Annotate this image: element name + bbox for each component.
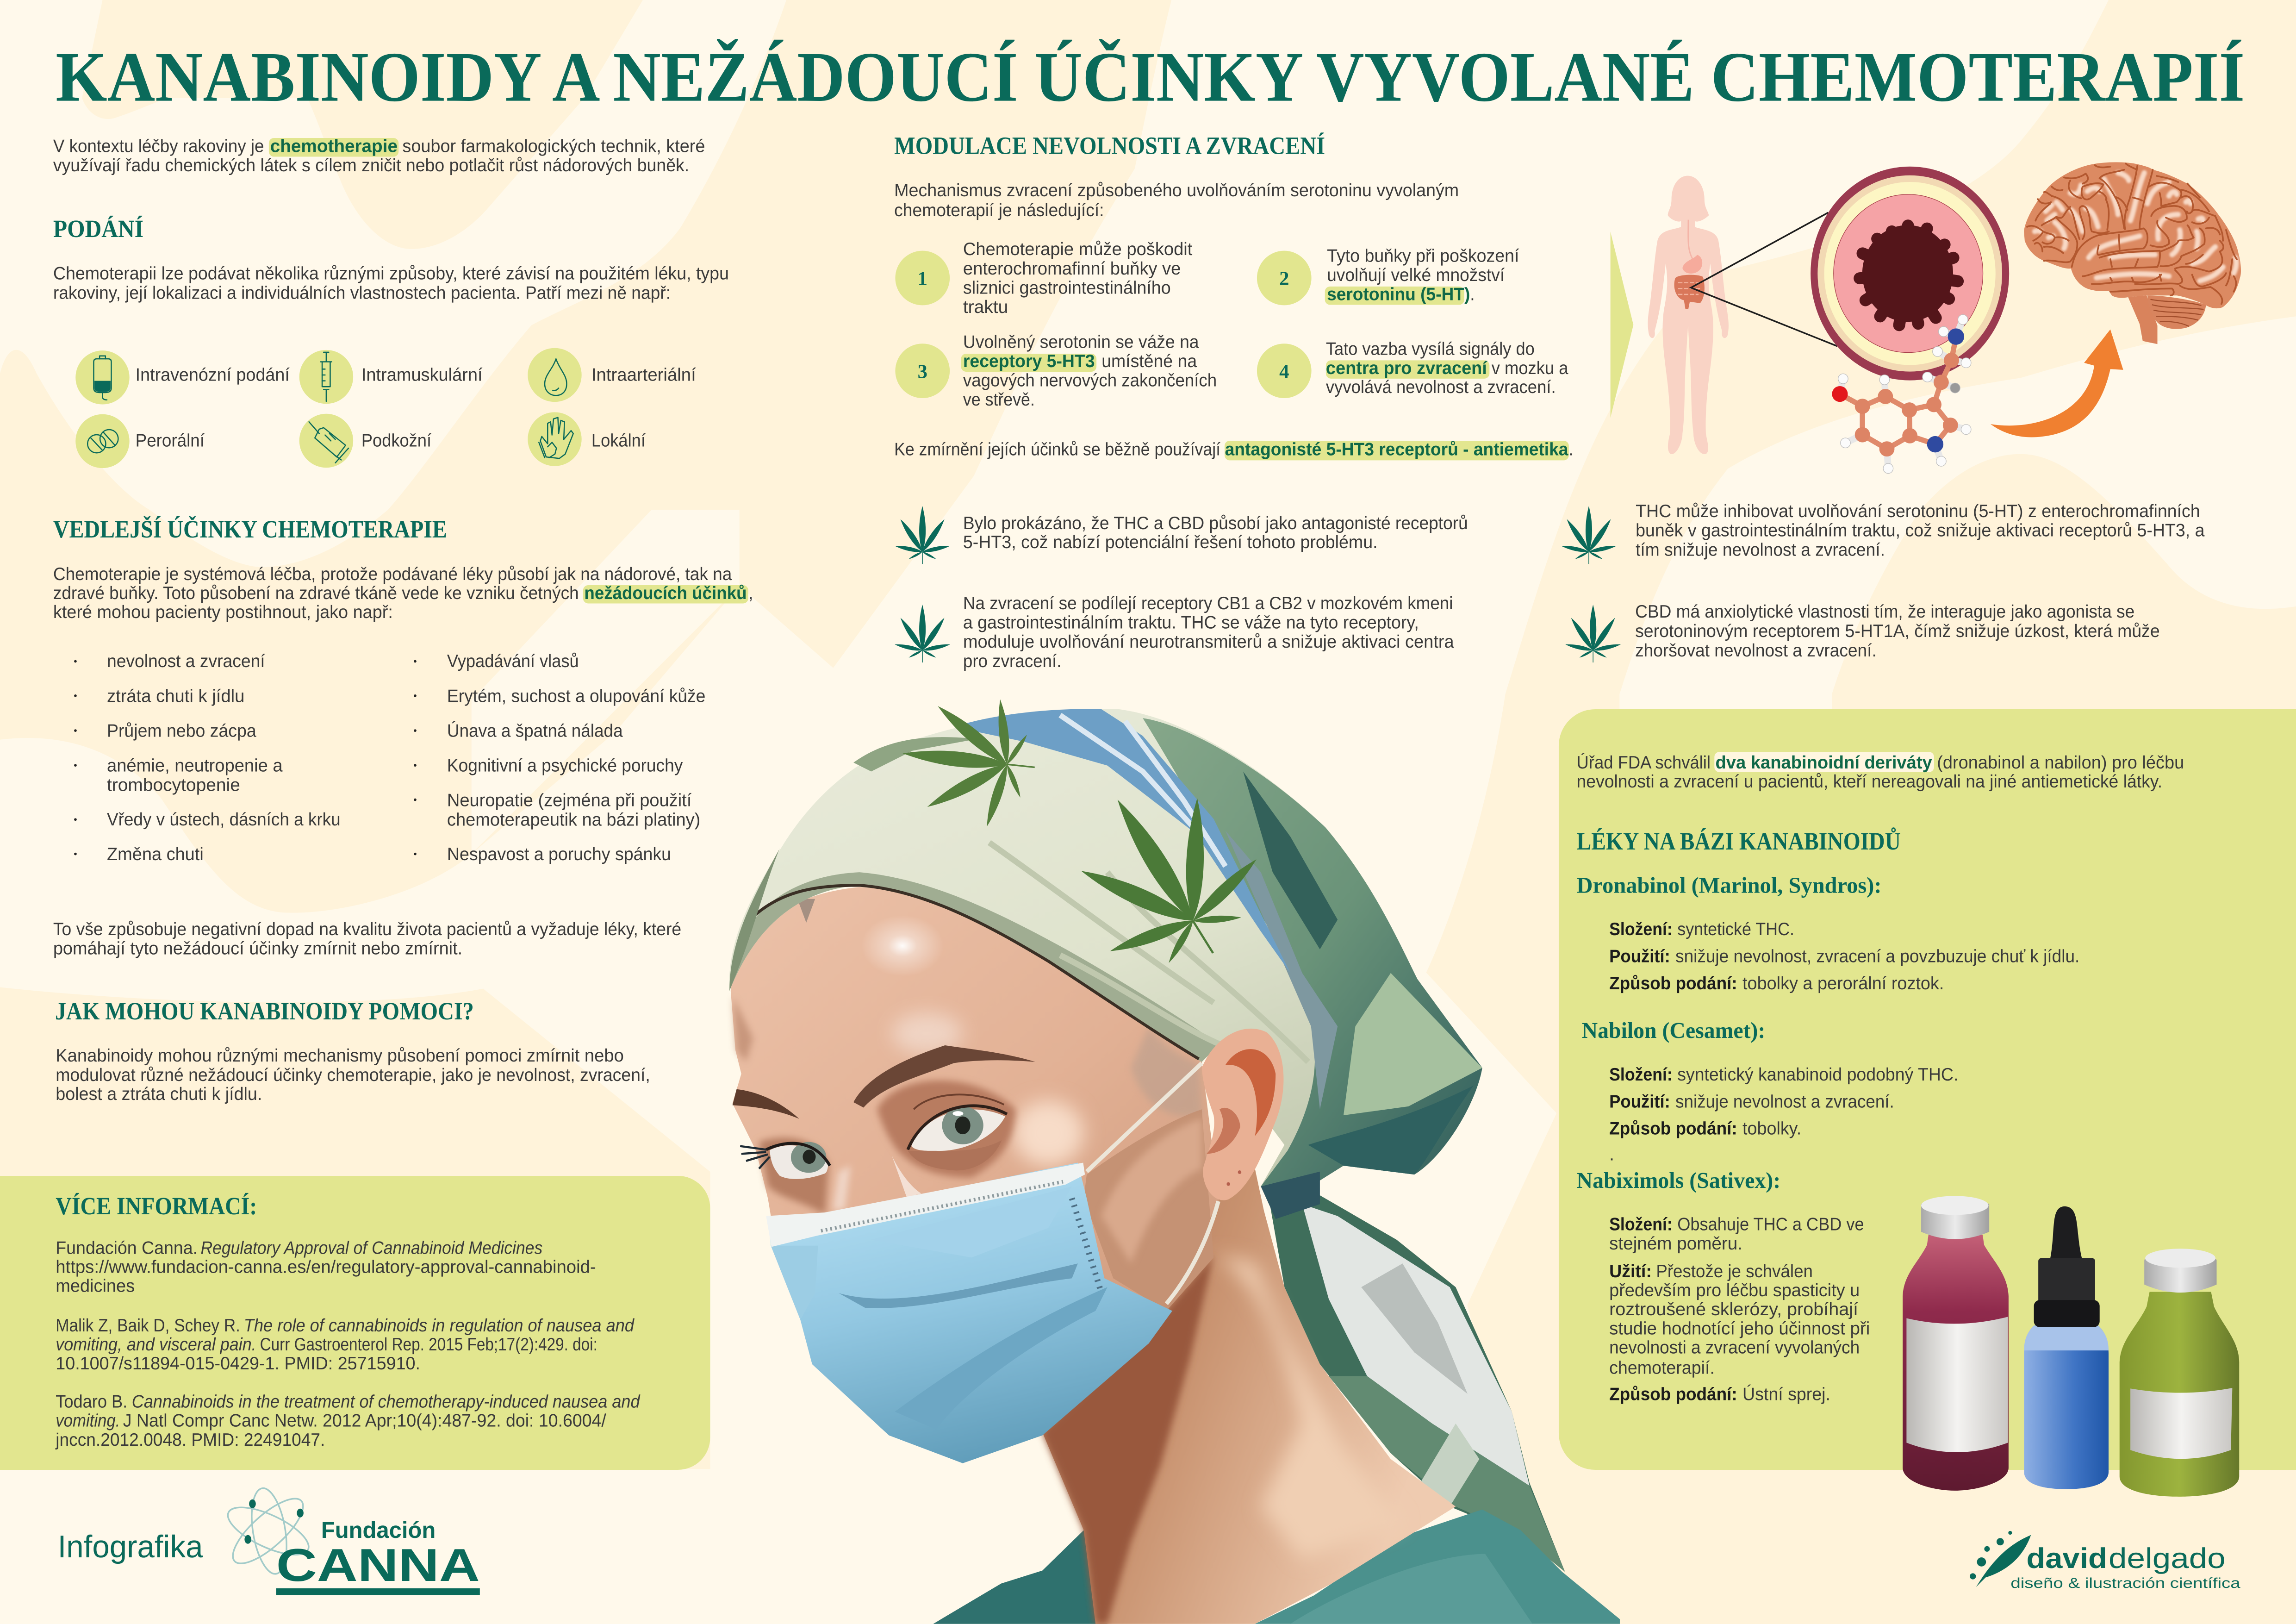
eyebrows (853, 1045, 1035, 1107)
dronabinol: Dronabinol (Marinol, Syndros): (1577, 874, 1882, 899)
heading: how cannabinoids help: JAK MOHOU KANABINOIDY POMOCI? (55, 998, 474, 1025)
left eye (740, 1142, 830, 1179)
shirt (933, 1510, 1620, 1624)
references: Fundación Canna. (56, 1237, 198, 1258)
references: jnccn.2012.0048. PMID: 22491047. (54, 1430, 325, 1450)
text: antagonists: . (1568, 439, 1574, 460)
text: thc cbd antagonists: Bylo prokázáno, že THC a CBD působí jako antagonisté receptorů (963, 513, 1468, 533)
nabiximols: především pro léčbu spasticity u (1609, 1280, 1860, 1301)
fda text: dva kanabinoidní deriváty (1716, 752, 1932, 773)
references: 10.1007/s11894-015-0429-1. PMID: 25715910. (56, 1353, 420, 1374)
text: how cannabinoids help: bolest a ztráta chuti k jídlu. (56, 1084, 262, 1105)
mask (766, 1163, 1172, 1463)
icon: pills (75, 414, 130, 468)
illustration: pointer lines (1691, 212, 1837, 346)
nabiximols: stejném poměru. (1609, 1233, 1742, 1254)
nabiximols: roztroušené sklerózy, probíhají (1609, 1299, 1859, 1320)
dronabinol: snižuje nevolnost, zvracení a povzbuzuje chuť k jídlu. (1675, 946, 2079, 967)
panel: cannabinoid drugs (1559, 709, 2296, 1470)
text: mechanism intro: chemoterapií je následující: (894, 200, 1104, 220)
text: cbd anxiolytic: serotoninovým receptorem 5-HT1A, čímž snižuje úzkost, která může (1635, 621, 2160, 641)
nabiximols: nevolnosti a zvracení vyvolaných (1609, 1337, 1860, 1358)
step 2: serotoninu (5-HT). (1327, 284, 1475, 305)
dronabinol: Složení: (1609, 919, 1673, 940)
nabiximols (1577, 1169, 1870, 1405)
list: side effects left: Změna chuti (107, 844, 204, 864)
sulci (2027, 163, 2237, 304)
text: antagonists: antagonisté 5-HT3 receptorů - antiemetika (1225, 439, 1568, 460)
nabiximols: Nabiximols (Sativex): (1577, 1169, 1780, 1194)
references: Todaro B. (56, 1392, 127, 1412)
list: side effects right: Kognitivní a psychické poruchy (447, 756, 684, 776)
nabilon: syntetický kanabinoid podobný THC. (1677, 1064, 1958, 1085)
step 4: Tato vazba vysílá signály do (1326, 338, 1535, 359)
step 1: Chemoterapie může poškodit (963, 239, 1193, 259)
nabilon: tobolky. (1742, 1118, 1801, 1139)
text: cb1 cb2: a gastrointestinálním traktu. THC se váže na tyto receptory, (963, 612, 1419, 633)
list: side effects right: Erytém, suchost a olupování kůže (447, 686, 706, 706)
text: cb1 cb2: moduluje uvolňování neurotransmiterů a snižuje aktivaci centra (963, 631, 1454, 652)
list: side effects left: ztráta chuti k jídlu (107, 686, 245, 706)
references: J Natl Compr Canc Netw. 2012 Apr;10(4):487-92. doi: 10.6004/ (123, 1411, 607, 1431)
icon: cannabis leaf (894, 605, 951, 662)
logo: fundación canna (222, 1486, 480, 1595)
text: side effects (53, 564, 753, 623)
step 3 (895, 332, 1217, 410)
label: Lokální (591, 431, 647, 451)
step 2: 2 (1279, 267, 1289, 289)
text: negative impact (53, 919, 682, 959)
nabilon: snižuje nevolnost a zvracení. (1675, 1092, 1894, 1112)
list: side effects right: Neuropatie (zejména při použití (447, 790, 692, 811)
illustration: bottles (1903, 1196, 2239, 1497)
red bottle (1903, 1196, 2009, 1491)
text: thc inhibits: buněk v gastrointestinálním traktu, což snižuje aktivaci receptorů 5-HT3, a (1636, 520, 2205, 541)
brain stem (2128, 295, 2158, 344)
references: Malik Z, Baik D, Schey R. (56, 1315, 240, 1336)
neck (1042, 1168, 1456, 1624)
step 4: vyvolává nevolnost a zvracení. (1326, 377, 1556, 398)
dronabinol (1577, 874, 2079, 993)
heading: podání: PODÁNÍ (53, 215, 144, 243)
label: Intraarteriální (591, 364, 697, 385)
ear (1202, 1029, 1283, 1200)
illustration: woman with mask and scarf (729, 689, 1620, 1624)
fda text (1577, 752, 2184, 792)
list: side effects left: anémie, neutropenie a (107, 756, 283, 776)
intro text: soubor farmakologických technik, které (402, 136, 705, 156)
blue dropper (2024, 1206, 2109, 1489)
step 3: Uvolněný serotonin se váže na (963, 332, 1199, 352)
step 3: 3 (918, 360, 928, 382)
panel: more information (0, 1176, 710, 1470)
infografika label: Infografika (58, 1530, 203, 1565)
intro text: chemotherapie (270, 136, 398, 156)
dronabinol: tobolky a perorální roztok. (1742, 973, 1944, 993)
illustration: brain (2024, 162, 2241, 344)
logo: david delgado: david (2027, 1543, 2107, 1575)
text: antagonists: Ke zmírnění jejích účinků se běžně používají (894, 439, 1221, 460)
step 4: v mozku a (1492, 358, 1568, 379)
label: Intravenózní podání (136, 364, 291, 385)
references: Regulatory Approval of Cannabinoid Medicines (200, 1237, 542, 1258)
nabilon: . (1609, 1144, 1614, 1165)
text: podání (53, 263, 729, 303)
text: mechanism intro: Mechanismus zvracení způsobeného uvolňováním serotoninu vyvolaným (894, 180, 1459, 200)
references: vomiting, and visceral pain. (56, 1334, 256, 1355)
step 1: traktu (963, 297, 1008, 318)
nabiximols: Obsahuje THC a CBD ve (1677, 1214, 1864, 1235)
fda text: (dronabinol a nabilon) pro léčbu (1937, 752, 2184, 773)
text: side effects: zdravé buňky. Toto působení na zdravé tkáně vede ke vzniku četných (53, 583, 579, 604)
steps (895, 239, 1568, 410)
step 1: enterochromafinní buňky ve (963, 258, 1181, 279)
nabilon (1582, 1019, 1958, 1165)
icon: syringe (299, 350, 353, 404)
arrow: orange (1991, 330, 2123, 437)
fda text: nevolnosti a zvracení u pacientů, kteří nereagovali na jiné antiemetické látky. (1577, 771, 2162, 792)
intro text (53, 136, 705, 175)
nabiximols: Užití: (1609, 1261, 1652, 1281)
illustration: intestine cross-section (1811, 167, 2009, 381)
label: Intramuskulární (361, 364, 483, 385)
list: side effects right: Únava a špatná nálada (447, 721, 623, 741)
step 4 (1257, 338, 1568, 398)
references: medicines (56, 1276, 135, 1296)
text: side effects: , (748, 583, 753, 604)
references: The role of cannabinoids in regulation of nausea and (244, 1315, 635, 1336)
icon: cannabis leaf (1561, 506, 1617, 564)
step 1: 1 (918, 267, 928, 289)
heading: modulation: MODULACE NEVOLNOSTI A ZVRACENÍ (894, 132, 1325, 160)
nabiximols: Složení: (1609, 1214, 1673, 1235)
face (731, 887, 1220, 1311)
scarf leaf (1043, 753, 1287, 999)
text: how cannabinoids help: Kanabinoidy mohou různými mechanismy působení pomoci zmírnit nebo (56, 1045, 624, 1066)
text: thc inhibits (1636, 501, 2205, 560)
logo: david delgado: delgado (2109, 1543, 2226, 1575)
step 2: Tyto buňky při poškození (1327, 246, 1520, 266)
dronabinol: Způsob podání: (1609, 973, 1737, 993)
intro text: V kontextu léčby rakoviny je (53, 136, 264, 156)
text: cb1 cb2: Na zvracení se podílejí receptory CB1 a CB2 v mozkovém kmeni (963, 593, 1453, 614)
list: side effects left: nevolnost a zvracení (107, 651, 266, 672)
intro text: využívají řadu chemických látek s cílem zničit nebo potlačit růst nádorových buněk. (53, 155, 689, 175)
list: side effects right: chemoterapeutik na bázi platiny) (447, 810, 700, 830)
text: podání: Chemoterapii lze podávat několika různými způsoby, které závisí na použitém léku, typu (53, 263, 729, 284)
illustration: serotonin molecule (1832, 315, 1971, 474)
nabilon: Použití: (1609, 1092, 1670, 1112)
text: cb1 cb2: pro zvracení. (963, 651, 1062, 672)
heading: side effects: VEDLEJŠÍ ÚČINKY CHEMOTERAPIE (53, 516, 447, 543)
icon: subcutaneous syringe (299, 414, 353, 468)
ear loops (1087, 1063, 1218, 1304)
nabiximols: Způsob podání: (1609, 1384, 1737, 1405)
illustration: body silhouette (1648, 176, 1729, 454)
label: Perorální (136, 431, 205, 451)
administration routes (75, 348, 697, 468)
eye socket (877, 1081, 1016, 1178)
references (54, 1237, 641, 1450)
icon: cannabis leaf (894, 506, 951, 564)
text: negative impact: To vše způsobuje negativní dopad na kvalitu života pacientů a vyžaduje léky, které (53, 919, 682, 940)
text: antagonists (894, 439, 1574, 460)
icon: cannabis leaf (1565, 605, 1621, 662)
text: how cannabinoids help: modulovat různé nežádoucí účinky chemoterapie, jako je nevolnost, zvracení, (56, 1065, 650, 1085)
logo: david delgado (1970, 1531, 2241, 1592)
label: Podkožní (361, 431, 432, 451)
nabilon: Nabilon (Cesamet): (1582, 1019, 1765, 1044)
text: cbd anxiolytic: zhoršovat nevolnost a zvracení. (1635, 640, 1877, 661)
text: thc cbd antagonists (963, 513, 1468, 553)
list: side effects right (414, 651, 706, 864)
text: side effects: Chemoterapie je systémová léčba, protože podávané léky působí jak na nádorové, tak na (53, 564, 732, 584)
text: podání: rakoviny, její lokalizaci a individuálních vlastnostech pacienta. Patří mezi ně např: (53, 283, 671, 303)
dronabinol: syntetické THC. (1677, 919, 1794, 940)
text: side effects: nežádoucích účinků (584, 583, 747, 604)
nabiximols: Přestože je schválen (1656, 1261, 1813, 1281)
list: side effects right: Nespavost a poruchy spánku (447, 844, 671, 864)
logo: fundación canna: CANNA (276, 1538, 480, 1591)
nabilon: Složení: (1609, 1064, 1673, 1085)
logo: fundación canna: Fundación (321, 1519, 436, 1544)
step 3: ve střevě. (963, 389, 1035, 410)
text: thc inhibits: tím snižuje nevolnost a zvracení. (1636, 540, 1885, 560)
step 2 (1257, 246, 1520, 305)
cerebellum (2147, 295, 2206, 329)
step 3: umístěné na (1101, 351, 1197, 371)
right eye (908, 1094, 1007, 1151)
icon: iv bag (75, 350, 130, 405)
list: side effects left (74, 651, 341, 864)
list: side effects left: Průjem nebo zácpa (107, 721, 256, 741)
text: thc cbd antagonists: 5-HT3, což nabízí potenciální řešení tohoto problému. (963, 532, 1378, 553)
text: how cannabinoids help (56, 1045, 650, 1105)
references: https://www.fundacion-canna.es/en/regulatory-approval-cannabinoid- (56, 1257, 596, 1277)
nabiximols: Ústní sprej. (1742, 1384, 1830, 1405)
nabiximols: studie hodnotící jeho účinnost při (1609, 1318, 1870, 1339)
scarf head (729, 689, 1482, 1219)
gyri highlights (2035, 173, 2236, 281)
text: cbd anxiolytic (1635, 601, 2160, 661)
text: negative impact: pomáhají tyto nežádoucí účinky zmírnit nebo zmírnit. (53, 938, 462, 959)
references: Curr Gastroenterol Rep. 2015 Feb;17(2):429. doi: (260, 1334, 597, 1355)
icon: hands (528, 412, 582, 466)
text: side effects: které mohou pacienty postihnout, jako např: (53, 602, 393, 623)
cerebrum (2024, 162, 2241, 308)
heading: VÍCE INFORMACÍ: (56, 1192, 257, 1220)
green bottle (2120, 1249, 2239, 1497)
heading: LÉKY NA BÁZI KANABINOIDŮ (1577, 826, 1901, 856)
scarf leaf (896, 689, 1041, 832)
references: Cannabinoids in the treatment of chemotherapy-induced nausea and (132, 1392, 641, 1412)
step 3: vagových nervových zakončeních (963, 370, 1217, 391)
text: cb1 cb2 (963, 593, 1454, 672)
list: side effects right: Vypadávání vlasů (447, 651, 579, 672)
step 4: centra pro zvracení (1326, 358, 1488, 379)
fda text: Úřad FDA schválil (1577, 752, 1711, 773)
arrow: green triangle (1611, 232, 1633, 418)
scarf tail (1267, 1187, 1565, 1572)
step 4: 4 (1279, 360, 1289, 382)
text: mechanism intro (894, 180, 1459, 220)
dronabinol: Použití: (1609, 946, 1670, 967)
text: cbd anxiolytic: CBD má anxiolytické vlastnosti tím, že interaguje jako agonista se (1635, 601, 2135, 622)
step 1 (895, 239, 1193, 318)
text: thc inhibits: THC může inhibovat uvolňování serotoninu (5-HT) z enterochromafinních (1636, 501, 2200, 521)
nabilon: Způsob podání: (1609, 1118, 1737, 1139)
nabiximols: chemoterapií. (1609, 1358, 1715, 1378)
step 1: sliznici gastrointestinálního (963, 278, 1171, 298)
icon: drop (528, 348, 582, 402)
logo: david delgado: diseño & ilustración científica (2010, 1576, 2241, 1592)
step 3: receptory 5-HT3 (963, 351, 1095, 371)
list: side effects left: Vředy v ústech, dásních a krku (107, 809, 341, 830)
step 2: uvolňují velké množství (1327, 265, 1506, 286)
list: side effects left: trombocytopenie (107, 775, 240, 795)
references: vomiting. (56, 1411, 120, 1431)
